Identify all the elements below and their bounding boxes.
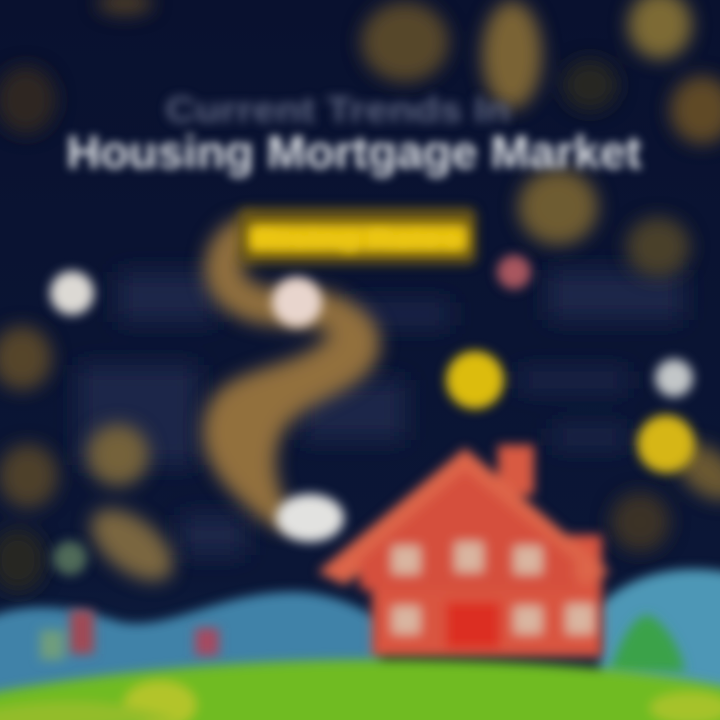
text block: left top [118, 272, 218, 322]
title line 2: Housing Mortgage Market [66, 126, 642, 178]
house [318, 445, 610, 657]
icons [50, 255, 695, 575]
house windows [392, 542, 594, 634]
blue hills [0, 569, 720, 720]
icon: white badge right [655, 359, 693, 397]
house body [372, 535, 602, 657]
icon: left white badge [50, 271, 94, 315]
text block: right middle [518, 370, 628, 390]
brown swirl arrow [203, 238, 380, 529]
icon: center pink badge [272, 277, 322, 327]
title [66, 89, 642, 178]
icon: right red badge [497, 255, 531, 289]
body text blocks [78, 270, 683, 555]
yellow heading bar: Rising Rates [256, 226, 460, 253]
small markers on hills [40, 610, 219, 660]
icon: yellow coin [446, 351, 504, 409]
house door [446, 602, 500, 648]
house roof [318, 448, 610, 585]
green ground [0, 660, 720, 720]
icon: small green badge [53, 541, 87, 575]
text block: center top [345, 302, 450, 326]
yellow heading bar [238, 208, 476, 264]
text block: right top [548, 270, 683, 320]
text block: center middle [300, 380, 405, 440]
text block: left middle [78, 365, 198, 465]
icon: white cloud [276, 494, 344, 542]
title line 1: Current Trends In [166, 89, 510, 130]
house chimney [498, 445, 534, 495]
green bush [610, 615, 685, 672]
text block: lower left [180, 515, 245, 555]
text block: right lower [552, 427, 627, 447]
icon: yellow coin lower [637, 415, 695, 473]
